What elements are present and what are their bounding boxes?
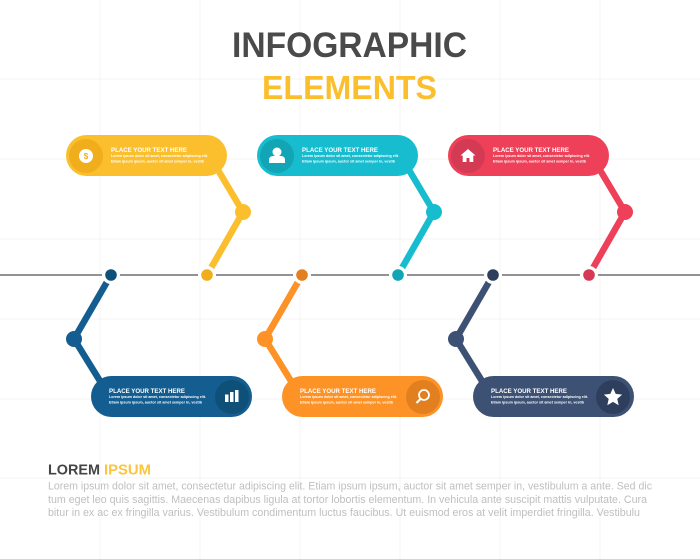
text block: orange step: Lorem ipsum dolor sit amet, consectetur adipiscing elit. bbox=[300, 395, 397, 399]
text block: teal step: Lorem ipsum dolor sit amet, consectetur adipiscing elit. bbox=[302, 154, 399, 158]
text block: body paragraph bbox=[48, 480, 652, 519]
title bbox=[232, 26, 467, 107]
icon: dollar coin: $ bbox=[84, 152, 89, 161]
text block: red step: Etiam ipsum ipsum, auctor sit amet semper in, vestib bbox=[493, 160, 587, 164]
text block: navy step: PLACE YOUR TEXT HERE bbox=[491, 388, 567, 395]
text block: teal step: PLACE YOUR TEXT HERE bbox=[302, 147, 378, 154]
panel: navy step bbox=[448, 266, 634, 417]
heading: lorem ipsum bbox=[48, 462, 151, 478]
title: ELEMENTS bbox=[262, 70, 437, 107]
text block: orange step bbox=[300, 388, 397, 404]
text block: yellow step bbox=[111, 147, 208, 164]
icon: star bbox=[596, 380, 630, 414]
text block: blue step: Lorem ipsum dolor sit amet, consectetur adipiscing elit. bbox=[109, 395, 206, 399]
text block: navy step: Etiam ipsum ipsum, auctor sit amet semper in, vestib bbox=[491, 400, 585, 404]
icon: user bbox=[260, 139, 294, 173]
text block: blue step: Etiam ipsum ipsum, auctor sit amet semper in, vestib bbox=[109, 400, 203, 404]
text block: red step: PLACE YOUR TEXT HERE bbox=[493, 147, 569, 154]
text block: body paragraph: Lorem ipsum dolor sit amet, consectetur adipiscing elit. Etiam ipsum ipsum, auctor sit amet semper in, vestibulum a ante. Sed dic bbox=[48, 480, 652, 492]
text block: body paragraph: tum eget leo quis sagittis. Maecenas dapibus ligula at tortor lobortis elementum. In vehicula ante suscipit mattis vulputate. Cura bbox=[48, 494, 648, 506]
icon: home bbox=[451, 139, 485, 173]
timeline bbox=[0, 274, 700, 276]
text block: navy step: Lorem ipsum dolor sit amet, consectetur adipiscing elit. bbox=[491, 395, 588, 399]
text block: teal step: Etiam ipsum ipsum, auctor sit amet semper in, vestib bbox=[302, 160, 396, 164]
text block: teal step bbox=[302, 147, 399, 164]
text block: blue step: PLACE YOUR TEXT HERE bbox=[109, 388, 185, 395]
text block: navy step bbox=[491, 388, 588, 404]
panel: teal step bbox=[257, 135, 442, 284]
heading: lorem ipsum: LOREM bbox=[48, 462, 100, 478]
text block: yellow step: PLACE YOUR TEXT HERE bbox=[111, 147, 187, 154]
icon: magnifier bbox=[406, 380, 440, 414]
title: INFOGRAPHIC bbox=[232, 26, 467, 65]
text block: orange step: Etiam ipsum ipsum, auctor sit amet semper in, vestib bbox=[300, 400, 394, 404]
text block: yellow step: Lorem ipsum dolor sit amet, consectetur adipiscing elit. bbox=[111, 154, 208, 158]
text block: yellow step: Etiam ipsum ipsum, auctor sit amet semper in, vestib bbox=[111, 160, 205, 164]
text block: orange step: PLACE YOUR TEXT HERE bbox=[300, 388, 376, 395]
text block: body paragraph: bitur in ex ac ex fringilla varius. Vestibulum condimentum luctus faucibus. Ut euismod eros at velit imperdiet fringilla. Vestibulu bbox=[48, 507, 640, 519]
text block: blue step bbox=[109, 388, 206, 404]
icon: bar chart bbox=[215, 380, 249, 414]
text block: red step bbox=[493, 147, 590, 164]
heading: lorem ipsum: IPSUM bbox=[104, 462, 151, 478]
icon: dollar coin bbox=[69, 139, 103, 173]
panel: yellow step bbox=[66, 135, 251, 284]
panel: blue step bbox=[66, 266, 252, 417]
panel: red step bbox=[448, 135, 633, 284]
panel: orange step bbox=[257, 266, 443, 417]
text block: red step: Lorem ipsum dolor sit amet, consectetur adipiscing elit. bbox=[493, 154, 590, 158]
